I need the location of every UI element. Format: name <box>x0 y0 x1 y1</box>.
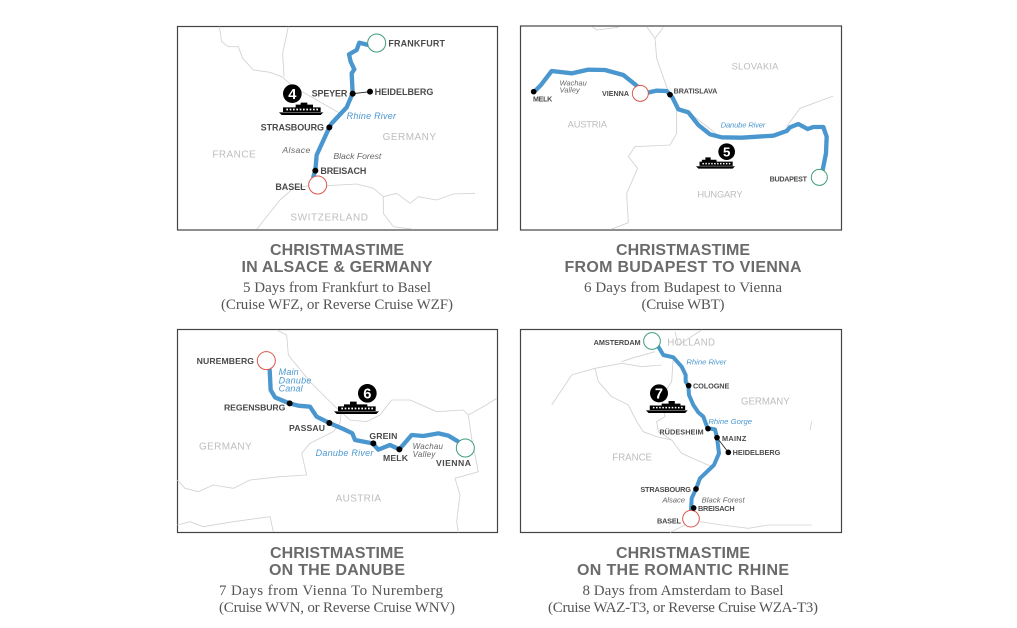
labels: countries: GERMANY <box>383 132 436 143</box>
labels: cities: SPEYER <box>312 88 348 98</box>
heading: CHRISTMASTIME <box>270 545 404 562</box>
details: 5 Days from Frankfurt to Basel <box>243 280 431 296</box>
badge: 6 nights <box>358 384 377 403</box>
port: Basel <box>309 176 327 194</box>
route: Rhine Amsterdam to Basel <box>658 347 719 510</box>
labels: cities <box>533 87 808 183</box>
labels: regions: Black Forest <box>702 496 746 505</box>
port: Vienna <box>456 439 474 457</box>
label: Rhine River: Rhine River <box>686 357 727 366</box>
badge: 4 nights <box>283 84 302 103</box>
details: (Cruise WBT) <box>642 297 724 313</box>
labels: cities <box>197 356 472 468</box>
route: Danube Melk to Budapest <box>535 70 637 91</box>
icon: ship <box>279 103 323 115</box>
labels: countries: HUNGARY <box>697 189 743 199</box>
heading: IN ALSACE & GERMANY <box>242 259 433 276</box>
heading <box>242 242 433 276</box>
labels: regions: Black Forest <box>333 151 382 161</box>
details: 7 Days from Vienna To Nuremberg <box>219 583 444 599</box>
badge: 5 nights <box>718 143 735 160</box>
label: Rhine River: Rhine River <box>347 111 397 121</box>
labels: cities: COLOGNE <box>693 382 729 391</box>
port: Amsterdam <box>644 333 660 349</box>
details: (Cruise WAZ-T3, or Reverse Cruise WZA-T3) <box>548 600 818 616</box>
badge: 4 nights: 4 <box>288 87 297 103</box>
port: Basel <box>683 510 699 527</box>
labels: countries <box>212 132 436 224</box>
label: Rhine Gorge: Rhine Gorge <box>708 417 752 426</box>
heading: CHRISTMASTIME <box>616 242 750 259</box>
labels: countries: AUSTRIA <box>336 493 381 504</box>
labels: cities: BUDAPEST <box>770 175 808 183</box>
labels: regions: Alsace <box>661 496 685 505</box>
details <box>548 583 818 616</box>
labels: regions <box>661 496 746 505</box>
labels: cities: BASEL <box>657 517 682 526</box>
details <box>219 583 455 616</box>
connector: Speyer to Heidelberg <box>353 92 370 94</box>
panel: Romantic Rhine map <box>520 330 842 532</box>
details <box>584 280 782 313</box>
labels: cities: BREISACH <box>698 504 735 513</box>
badge: 7 nights: 7 <box>655 386 663 402</box>
labels: countries: GERMANY <box>741 397 790 408</box>
label: Danube River: Danube River <box>316 448 374 458</box>
heading: CHRISTMASTIME <box>270 242 404 259</box>
labels: cities: MAINZ <box>722 434 747 443</box>
details: 6 Days from Budapest to Vienna <box>584 280 782 296</box>
icon: ship <box>696 157 735 169</box>
labels: countries: FRANCE <box>612 452 653 463</box>
connector: Mainz to Heidelberg <box>717 438 728 452</box>
labels: countries: SWITZERLAND <box>290 213 368 224</box>
labels: cities <box>594 338 781 526</box>
route: Danube Nuremberg to Vienna <box>270 370 458 450</box>
port: Vienna <box>632 85 648 101</box>
label: Main Danube Canal: Canal <box>279 383 304 393</box>
details: (Cruise WVN, or Reverse Cruise WNV) <box>219 600 455 616</box>
labels: regions <box>281 145 382 161</box>
label: Wachau Valley: Wachau <box>413 442 444 451</box>
panel: Budapest to Vienna map <box>520 26 842 230</box>
label: Wachau Valley: Wachau <box>560 78 587 87</box>
label: Wachau Valley: Valley <box>413 450 436 459</box>
caption: On the Danube <box>219 545 455 616</box>
labels: countries: AUSTRIA <box>568 120 608 130</box>
stops <box>287 400 402 452</box>
port: Budapest <box>811 169 827 185</box>
heading: FROM BUDAPEST TO VIENNA <box>564 259 802 276</box>
labels: cities: VIENNA <box>436 458 472 468</box>
label: Wachau Valley <box>560 78 587 94</box>
port: Frankfurt <box>368 34 386 52</box>
labels: cities: RÜDESHEIM <box>659 427 704 436</box>
icon: ship <box>646 401 688 413</box>
stops <box>686 383 731 511</box>
labels: cities: MELK <box>533 96 553 104</box>
stops <box>531 89 673 97</box>
label: Main Danube Canal: Main <box>279 367 299 377</box>
labels: cities: BASEL <box>275 182 306 192</box>
caption: Budapest to Vienna <box>564 242 802 313</box>
labels: cities: STRASBOURG <box>261 122 324 132</box>
labels: cities: MELK <box>383 453 409 463</box>
labels: cities: BRATISLAVA <box>674 87 717 95</box>
route: Rhine Frankfurt to Basel <box>313 43 368 177</box>
heading <box>269 545 405 579</box>
label: Wachau Valley <box>413 442 444 459</box>
labels: cities: NUREMBERG <box>197 356 254 366</box>
heading <box>577 545 789 579</box>
labels: cities: PASSAU <box>289 423 325 433</box>
labels: cities: HEIDELBERG <box>375 87 433 97</box>
badge: 5 nights: 5 <box>723 144 731 159</box>
labels: cities: HEIDELBERG <box>733 448 781 457</box>
heading: CHRISTMASTIME <box>616 545 750 562</box>
labels: cities: GREIN <box>369 431 397 441</box>
caption: On the Romantic Rhine <box>548 545 818 616</box>
caption: Alsace and Germany <box>221 242 453 313</box>
badge: 6 nights: 6 <box>363 387 371 403</box>
badge: 7 nights <box>650 384 668 402</box>
labels: countries <box>568 61 779 199</box>
labels: countries: HOLLAND <box>667 337 715 348</box>
label: Wachau Valley: Valley <box>560 85 581 94</box>
port: Nuremberg <box>257 352 275 370</box>
labels: countries <box>612 337 790 463</box>
label: Main Danube Canal <box>279 367 311 393</box>
stops <box>312 89 373 174</box>
details: 8 Days from Amsterdam to Basel <box>582 583 784 599</box>
icon: ship <box>334 402 379 414</box>
panel: Alsace and Germany map <box>178 26 498 230</box>
labels: countries: FRANCE <box>212 150 256 161</box>
labels: cities: VIENNA <box>602 90 629 98</box>
heading <box>564 242 802 276</box>
label: Danube River: Danube River <box>721 121 766 130</box>
label: Main Danube Canal: Danube <box>279 375 311 385</box>
labels: countries: SLOVAKIA <box>732 61 779 71</box>
labels: cities: BREISACH <box>320 166 366 176</box>
labels: regions: Alsace <box>281 145 311 155</box>
heading: ON THE DANUBE <box>269 562 405 579</box>
labels: countries: GERMANY <box>199 442 252 453</box>
heading: ON THE ROMANTIC RHINE <box>577 562 789 579</box>
labels: cities: STRASBOURG <box>640 485 691 494</box>
labels: cities: REGENSBURG <box>224 403 286 413</box>
labels: countries <box>199 442 381 504</box>
panel: Danube map <box>177 330 498 532</box>
labels: cities <box>261 39 445 192</box>
labels: cities: AMSTERDAM <box>594 338 641 347</box>
details <box>221 280 453 313</box>
details: (Cruise WFZ, or Reverse Cruise WZF) <box>221 297 453 313</box>
labels: cities: FRANKFURT <box>388 39 445 49</box>
